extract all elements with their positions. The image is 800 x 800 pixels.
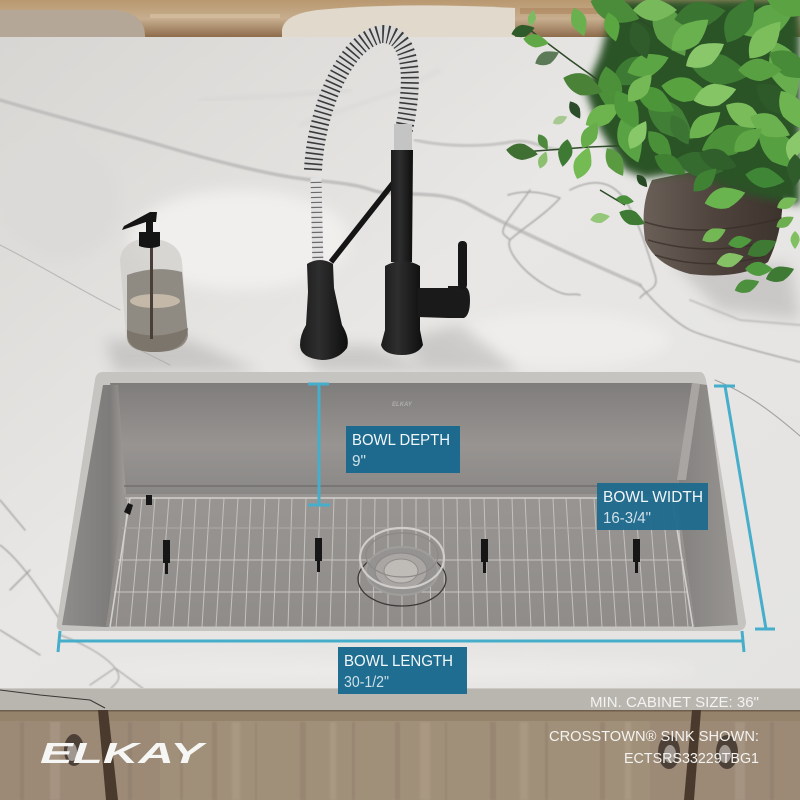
model information xyxy=(549,728,759,767)
counter front edge xyxy=(0,688,800,712)
stainless sink xyxy=(57,372,746,631)
sprayer base xyxy=(300,260,348,360)
faucet arm xyxy=(331,177,398,262)
base layer of leaves xyxy=(586,0,800,183)
left wall xyxy=(62,385,126,627)
cast shadows on marble xyxy=(105,260,800,372)
bottom grid rack xyxy=(110,498,693,627)
callout: bowl length: BOWL LENGTH xyxy=(344,653,453,670)
minimum cabinet size note: MIN. CABINET SIZE: 36" xyxy=(590,694,759,711)
embossed logo: ELKAY xyxy=(392,402,413,408)
marble veins xyxy=(0,70,800,690)
wood cabinets xyxy=(0,710,800,800)
callout: bowl width: BOWL WIDTH xyxy=(603,489,703,506)
callout: bowl depth: 9" xyxy=(352,453,366,470)
faucet body xyxy=(391,150,413,262)
callout: bowl width: 16-3/4" xyxy=(603,510,651,527)
pull-down faucet xyxy=(300,34,470,360)
plant pot xyxy=(644,166,783,276)
sink floor xyxy=(106,494,695,627)
dimension: bowl length xyxy=(58,631,744,652)
rack clip hooks xyxy=(124,495,640,574)
dimension: bowl depth xyxy=(308,384,330,505)
drain strainer xyxy=(358,528,446,606)
marble mottling xyxy=(0,140,700,682)
leaves draped over pot xyxy=(699,182,800,297)
dimension: bowl width xyxy=(714,386,775,629)
model information: CROSSTOWN® SINK SHOWN: xyxy=(549,728,759,745)
Elkay logo: ELKAY xyxy=(40,738,207,770)
cabinet knobs xyxy=(64,734,738,769)
wood background behind counter xyxy=(0,0,800,38)
right wall xyxy=(677,383,738,627)
soap dispenser xyxy=(120,212,188,352)
back wall xyxy=(110,383,692,495)
sink rim xyxy=(57,372,746,631)
potted plant foliage xyxy=(505,0,800,297)
faucet handle xyxy=(418,286,470,318)
cabinet door gaps xyxy=(0,710,800,800)
callout: bowl depth xyxy=(346,426,460,473)
model information: ECTSRS33229TBG1 xyxy=(624,750,759,767)
callout: bowl length xyxy=(338,647,467,694)
callout: bowl width xyxy=(597,483,708,530)
callout: bowl depth: BOWL DEPTH xyxy=(352,432,450,449)
sprayer hose xyxy=(313,34,412,268)
stools xyxy=(0,5,515,38)
callout: bowl length: 30-1/2" xyxy=(344,674,389,691)
